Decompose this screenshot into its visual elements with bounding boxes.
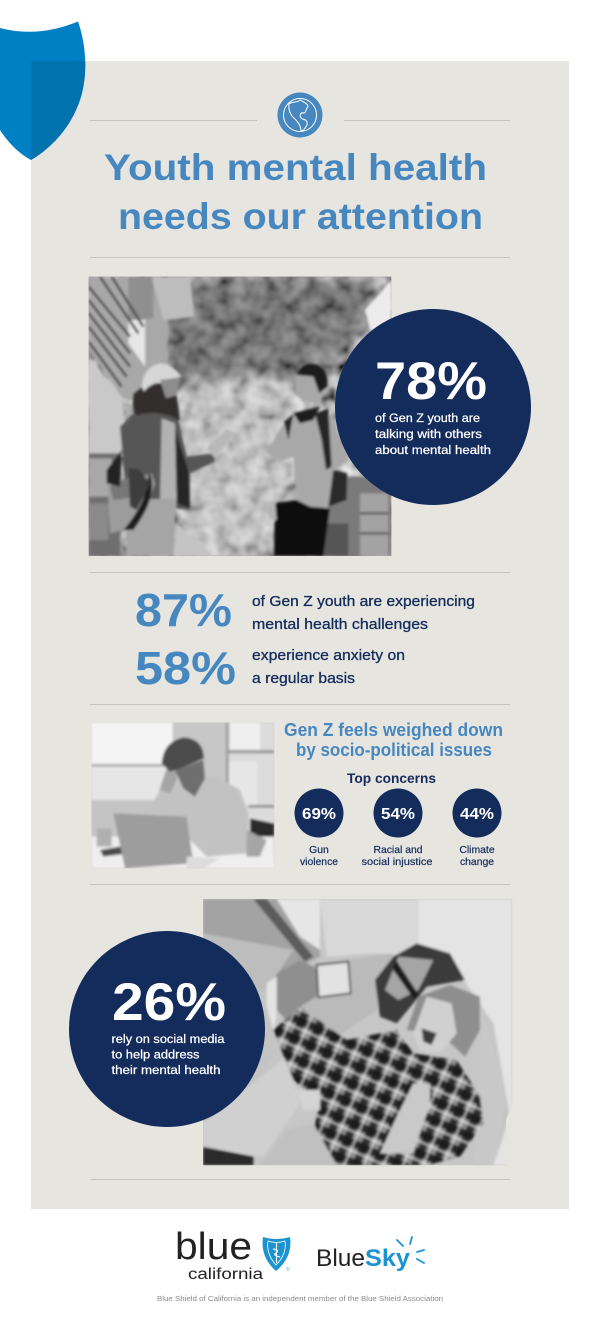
stat circle: 26%: to help address bbox=[112, 1048, 200, 1062]
concern: climate change bbox=[452, 788, 502, 868]
concern: racial and social injustice: 54% bbox=[381, 806, 415, 823]
logo: Blue Shield of California: blue bbox=[175, 1226, 252, 1268]
divider bbox=[90, 572, 510, 573]
stat: 58%: 58% bbox=[135, 642, 236, 694]
stat circle: 26%: 26% bbox=[112, 973, 226, 1032]
footer disclaimer: Blue Shield of California is an independent member of the Blue Shield Association bbox=[157, 1294, 443, 1303]
concern: climate change: Climate bbox=[459, 845, 495, 856]
stat circle: 26%: their mental health bbox=[112, 1063, 221, 1077]
logo: BlueSky: Blue bbox=[316, 1245, 365, 1272]
divider bbox=[90, 704, 510, 705]
stat circle: 26% bbox=[69, 931, 265, 1127]
concern: gun violence: violence bbox=[300, 857, 338, 868]
stat: 58%: a regular basis bbox=[252, 671, 355, 687]
logo: Blue Shield of California bbox=[175, 1226, 290, 1283]
concern: racial and social injustice: Racial and bbox=[373, 845, 423, 856]
logo: Blue Shield of California: ® bbox=[286, 1266, 290, 1273]
stat: 58%: experience anxiety on bbox=[252, 648, 405, 664]
divider bbox=[90, 884, 510, 885]
title: needs our attention bbox=[118, 196, 483, 237]
icon: globe bbox=[278, 92, 322, 138]
photo: two young men talking bbox=[89, 277, 391, 556]
concern: gun violence bbox=[294, 788, 344, 868]
stat: 58% bbox=[135, 642, 405, 694]
logo: Blue Shield of California: california bbox=[188, 1266, 263, 1283]
photo: stressed student at laptop bbox=[91, 722, 274, 868]
title bbox=[104, 147, 487, 237]
logo: BlueSky: Sky bbox=[365, 1245, 411, 1272]
stat circle: 78%: talking with others bbox=[375, 427, 482, 441]
stat circle: 78%: 78% bbox=[375, 352, 487, 411]
stat: 87% bbox=[135, 584, 475, 636]
divider bbox=[90, 257, 510, 258]
header rule right bbox=[344, 120, 510, 121]
stat: 87%: mental health challenges bbox=[252, 617, 428, 633]
logo: BlueSky bbox=[316, 1237, 424, 1272]
stat: 87%: of Gen Z youth are experiencing bbox=[252, 594, 475, 610]
heading: Gen Z feels weighed down bbox=[284, 720, 503, 760]
concern: gun violence: Gun bbox=[309, 845, 329, 856]
stat circle: 78%: about mental health bbox=[375, 443, 491, 457]
concern: racial and social injustice bbox=[362, 788, 433, 868]
stat circle: 78% bbox=[335, 309, 531, 505]
divider bbox=[91, 1179, 510, 1180]
title: Youth mental health bbox=[104, 147, 487, 188]
background panel bbox=[31, 61, 569, 1209]
header rule left bbox=[90, 120, 257, 121]
heading: Gen Z feels weighed down: by socio-political issues bbox=[296, 740, 492, 760]
stat circle: 78%: of Gen Z youth are bbox=[375, 411, 480, 425]
heading: Gen Z feels weighed down: Gen Z feels weighed down bbox=[284, 720, 503, 740]
concern: racial and social injustice: social injustice bbox=[362, 857, 433, 868]
concern: climate change: change bbox=[460, 857, 494, 868]
concern: climate change: 44% bbox=[460, 806, 494, 823]
shield decoration bbox=[0, 22, 85, 160]
subheading: top concerns: Top concerns bbox=[347, 770, 436, 786]
stat: 87%: 87% bbox=[135, 584, 232, 636]
concern: gun violence: 69% bbox=[302, 806, 336, 823]
stat circle: 26%: rely on social media bbox=[112, 1032, 225, 1046]
photo: two girls taking a selfie bbox=[203, 899, 512, 1165]
